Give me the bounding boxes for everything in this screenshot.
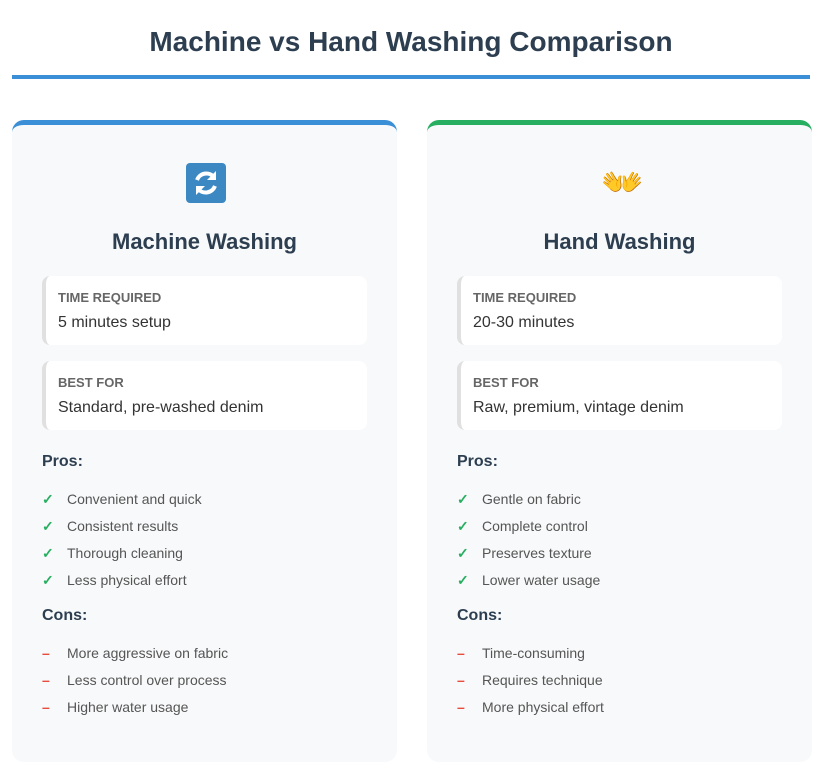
info: best for: BEST FOR (58, 375, 124, 390)
pros list: Complete control (482, 518, 588, 534)
pros list: Thorough cleaning (67, 545, 183, 561)
pros list: ✓ (457, 518, 469, 534)
cons list: – (457, 699, 465, 715)
pros list: Less physical effort (67, 572, 187, 588)
info: best for (42, 361, 367, 430)
cons list: More physical effort (482, 699, 604, 715)
info: time: TIME REQUIRED (58, 290, 161, 305)
pros list: Consistent results (67, 518, 178, 534)
heading: Machine Washing (112, 229, 297, 254)
pros list: Convenient and quick (67, 491, 202, 507)
info: time: 20-30 minutes (473, 314, 574, 331)
info: best for: BEST FOR (473, 375, 539, 390)
cons list: – (42, 645, 50, 661)
info: best for: Standard, pre-washed denim (58, 399, 263, 416)
info: time (42, 276, 367, 345)
cons list: Less control over process (67, 672, 227, 688)
cons heading: Cons: (42, 607, 87, 624)
icon: refresh arrows (186, 163, 226, 203)
cons heading: Cons: (457, 607, 502, 624)
cons list: – (457, 645, 465, 661)
pros list (457, 491, 600, 588)
pros list: Gentle on fabric (482, 491, 581, 507)
pros list: ✓ (457, 491, 469, 507)
pros list: ✓ (42, 518, 54, 534)
cons list: – (42, 672, 50, 688)
cons list: Requires technique (482, 672, 603, 688)
pros list: ✓ (457, 545, 469, 561)
pros heading: Pros: (457, 453, 498, 470)
cons list: Time-consuming (482, 645, 585, 661)
cons list: More aggressive on fabric (67, 645, 228, 661)
pros list: ✓ (42, 545, 54, 561)
pros list: ✓ (42, 572, 54, 588)
pros heading: Pros: (42, 453, 83, 470)
title: Machine vs Hand Washing Comparison (149, 26, 673, 57)
pros list: ✓ (42, 491, 54, 507)
icon: open hands: 👐 (601, 164, 643, 202)
cons list: Higher water usage (67, 699, 188, 715)
panel: machine washing (12, 120, 397, 762)
pros list: Lower water usage (482, 572, 600, 588)
info: best for (457, 361, 782, 430)
cons list (457, 645, 604, 715)
info: time (457, 276, 782, 345)
cons list: – (457, 672, 465, 688)
panel: hand washing (427, 120, 812, 762)
pros list: ✓ (457, 572, 469, 588)
cons list (42, 645, 228, 715)
info: time: 5 minutes setup (58, 314, 171, 331)
pros list (42, 491, 202, 588)
heading: Hand Washing (544, 229, 695, 254)
pros list: Preserves texture (482, 545, 592, 561)
info: time: TIME REQUIRED (473, 290, 576, 305)
cons list: – (42, 699, 50, 715)
info: best for: Raw, premium, vintage denim (473, 399, 684, 416)
